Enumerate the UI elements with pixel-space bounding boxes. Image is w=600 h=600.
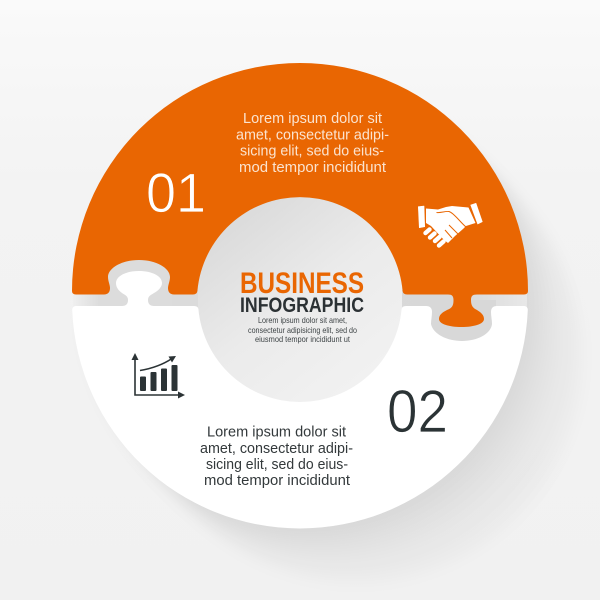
infographic canvas — [72, 63, 572, 574]
text block: top piece: Lorem ipsum dolor sit — [243, 111, 382, 127]
text block: centre: eiusmod tempor incididunt ut — [255, 334, 351, 344]
icon: bar chart — [132, 353, 185, 398]
centre circle — [197, 197, 403, 403]
text block: top piece — [236, 111, 389, 176]
text block: top piece: sicing elit, sed do eius- — [240, 144, 384, 160]
text block: centre: consectetur adipisicing elit, sed do — [248, 325, 357, 335]
number 01: 01 — [146, 161, 206, 224]
panel: 01 orange puzzle piece — [72, 63, 528, 327]
text block: bottom piece: sicing elit, sed do eius- — [206, 457, 348, 473]
heading: BUSINESS INFOGRAPHIC — [240, 267, 364, 317]
text block: bottom piece — [200, 424, 353, 489]
text block: bottom piece: mod tempor incididunt — [204, 473, 350, 489]
heading: BUSINESS INFOGRAPHIC: INFOGRAPHIC — [240, 294, 364, 317]
panel: 02 white puzzle piece — [72, 271, 528, 528]
gap shadow between puzzle pieces — [92, 266, 527, 308]
text block: bottom piece: Lorem ipsum dolor sit — [207, 424, 346, 440]
icon: handshake — [418, 203, 482, 246]
long shadow — [79, 79, 583, 583]
text block: centre: Lorem ipsum dolor sit amet, — [258, 315, 347, 325]
heading: BUSINESS INFOGRAPHIC: BUSINESS — [240, 267, 364, 300]
text block: centre — [248, 315, 357, 344]
text block: top piece: amet, consectetur adipi- — [236, 128, 389, 144]
text block: bottom piece: amet, consectetur adipi- — [200, 441, 353, 457]
text block: top piece: mod tempor incididunt — [239, 160, 386, 176]
number 02: 02 — [387, 378, 448, 445]
